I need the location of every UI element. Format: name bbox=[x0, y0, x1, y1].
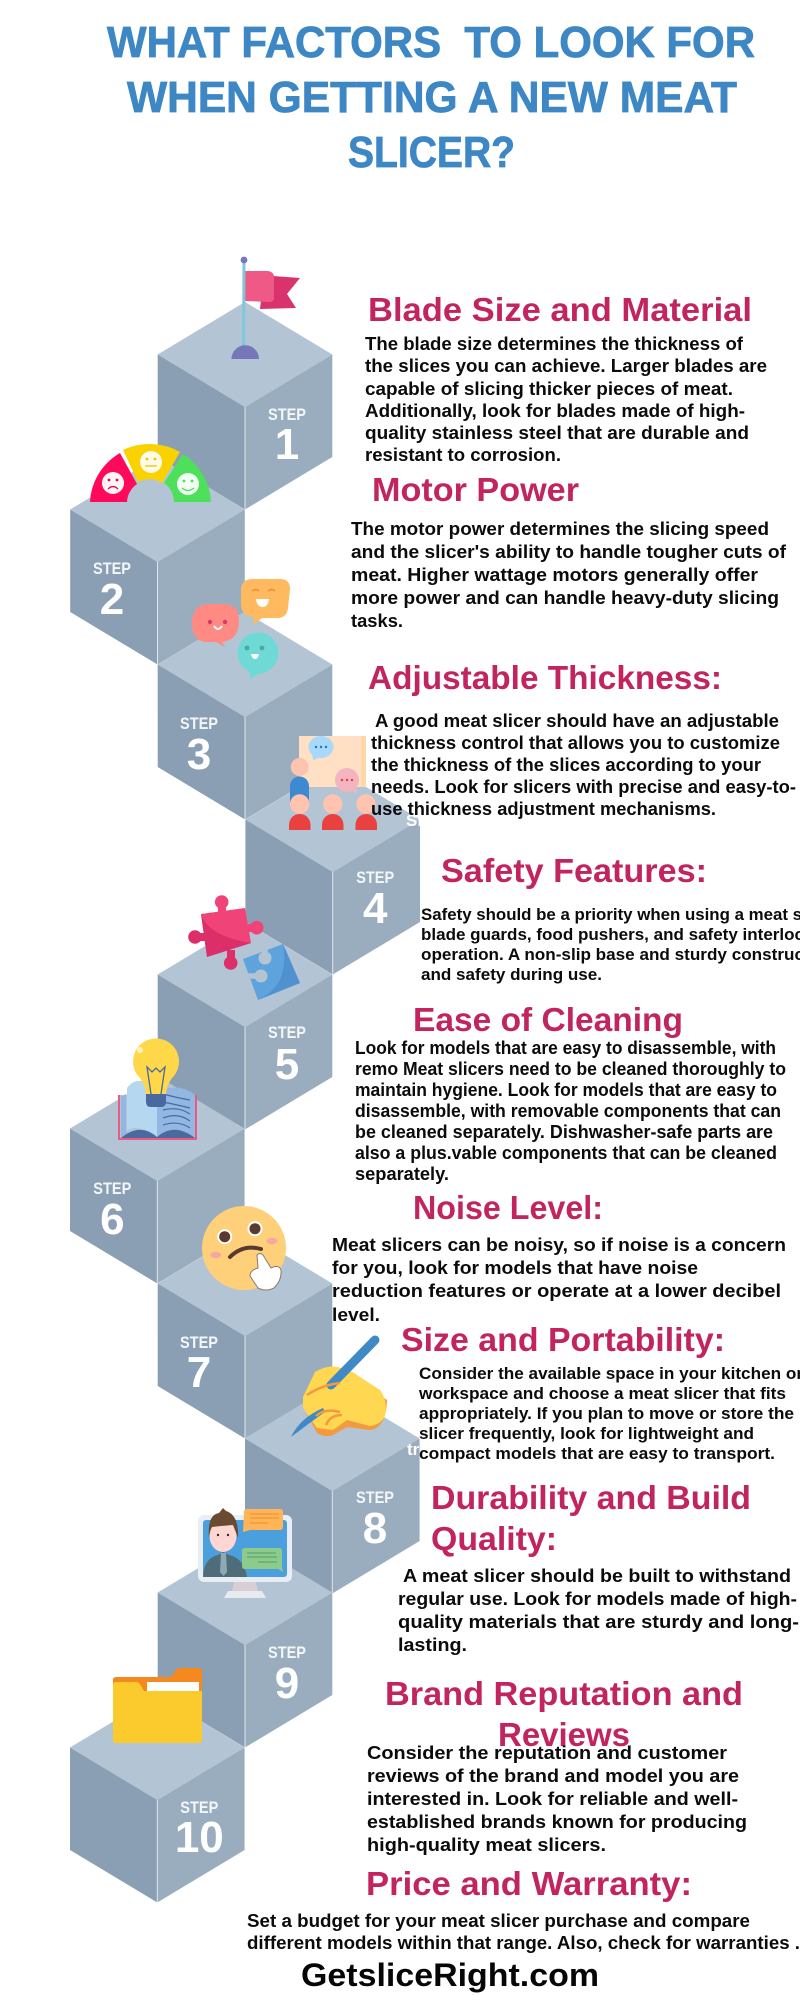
body text: thickness: needs. Look for slicers with precise and easy-to- bbox=[371, 776, 796, 797]
section: Motor Power bbox=[351, 471, 787, 631]
step 7 block: STEP bbox=[180, 1333, 218, 1352]
body text: cleaning: maintain hygiene. Look for models that are easy to bbox=[355, 1079, 777, 1100]
step 9 block: 9 bbox=[275, 1659, 299, 1708]
body text: thickness: A good meat slicer should have an adjustable bbox=[375, 710, 779, 731]
step 8 block: STEP bbox=[356, 1488, 394, 1507]
body text: blade: Additionally, look for blades made of high- bbox=[365, 400, 745, 421]
body text: cleaning: be cleaned separately. Dishwasher-safe parts are bbox=[355, 1121, 773, 1142]
icon: mood gauge bbox=[90, 444, 211, 502]
section: Durability and Build Quality: Durability and Build bbox=[431, 1479, 751, 1516]
icon: book and light bulb bbox=[118, 1038, 197, 1140]
step 1 block: STEP bbox=[268, 405, 306, 424]
step 6 block: 6 bbox=[100, 1195, 125, 1244]
footer: website: GetsliceRight.com bbox=[301, 1957, 599, 1993]
body text: size: workspace and choose a meat slicer that fits bbox=[418, 1385, 786, 1403]
body text: size bbox=[418, 1365, 800, 1463]
step 4 block: STEP bbox=[356, 868, 394, 887]
step 1 block: 1 bbox=[275, 420, 299, 469]
body text: noise: level. bbox=[332, 1304, 380, 1325]
stray clipped label on step 4: Sl bbox=[406, 811, 422, 830]
body text: size: appropriately. If you plan to move or store the bbox=[419, 1405, 794, 1423]
section: Blade Size and Material bbox=[365, 291, 767, 465]
step 6 block: STEP bbox=[93, 1179, 131, 1198]
section: Brand Reputation and Reviews bbox=[367, 1675, 747, 1855]
section: Durability and Build Quality: Quality: bbox=[431, 1520, 557, 1557]
body text: blade: The blade size determines the thickness of bbox=[365, 333, 744, 354]
title: WHAT FACTORS TO LOOK FOR bbox=[107, 18, 755, 67]
body text: brand: established brands known for producing bbox=[367, 1811, 747, 1832]
body text: durability: regular use. Look for models made of high- bbox=[398, 1588, 797, 1609]
body text: noise: Meat slicers can be noisy, so if noise is a concern bbox=[332, 1234, 786, 1255]
icon: puzzle pieces bbox=[188, 895, 300, 1000]
step 9 block: STEP bbox=[268, 1643, 306, 1662]
section: Ease of Cleaning: Ease of Cleaning bbox=[413, 1001, 683, 1038]
section: Brand Reputation and Reviews: Brand Reputation and bbox=[385, 1675, 743, 1712]
body text: blade: resistant to corrosion. bbox=[365, 444, 561, 465]
body text: noise: for you, look for models that have noise bbox=[332, 1257, 698, 1278]
body text: brand: Consider the reputation and customer bbox=[367, 1742, 727, 1763]
body text: size: Consider the available space in your kitchen or bbox=[419, 1365, 800, 1383]
section: Durability and Build Quality bbox=[398, 1479, 799, 1655]
body text: cleaning: disassemble, with removable components that can bbox=[355, 1100, 781, 1121]
body text: motor: tasks. bbox=[351, 610, 403, 631]
body text: motor bbox=[351, 518, 787, 631]
icon: meeting bbox=[289, 736, 377, 830]
section: Size and Portability bbox=[401, 1321, 800, 1463]
body text: safety: blade guards, food pushers, and safety interloc bbox=[421, 926, 800, 944]
section: Motor Power: Motor Power bbox=[372, 471, 579, 508]
step 5 block: 5 bbox=[275, 1040, 299, 1089]
section: Size and Portability: Size and Portability: bbox=[401, 1321, 725, 1358]
body text: cleaning bbox=[355, 1037, 786, 1184]
step 9 block bbox=[158, 1540, 332, 1748]
icon: folder bbox=[113, 1668, 202, 1743]
body text: brand: interested in. Look for reliable and well- bbox=[367, 1788, 738, 1809]
body text: motor: meat. Higher wattage motors generally offer bbox=[351, 564, 758, 585]
section: Price and Warranty: Price and Warranty: bbox=[366, 1865, 692, 1902]
body text: noise bbox=[332, 1234, 786, 1325]
step 6 block bbox=[70, 1076, 245, 1284]
body text: brand bbox=[367, 1742, 747, 1855]
section: Blade Size and Material: Blade Size and Material bbox=[368, 291, 752, 328]
body text: brand: reviews of the brand and model you are bbox=[367, 1765, 739, 1786]
step 8 block bbox=[245, 1386, 420, 1594]
body text: size: compact models that are easy to transport. bbox=[419, 1445, 775, 1463]
section: Safety Features: Safety Features: bbox=[441, 852, 707, 889]
section: Noise Level: Noise Level: bbox=[413, 1189, 603, 1226]
icon: thinking face bbox=[202, 1206, 286, 1290]
step 7 block bbox=[158, 1231, 332, 1438]
step 2 block: 2 bbox=[100, 575, 124, 624]
body text: cleaning: also a plus.vable components that can be cleaned bbox=[355, 1142, 777, 1163]
body text: blade bbox=[365, 333, 767, 465]
body text: price bbox=[247, 1910, 800, 1953]
step 2 block bbox=[70, 457, 245, 664]
step 1 block bbox=[158, 302, 332, 510]
body text: safety: operation. A non-slip base and sturdy construc bbox=[421, 946, 800, 964]
icon: monitor with presenter bbox=[198, 1508, 292, 1598]
body text: thickness bbox=[371, 710, 796, 819]
body text: durability: lasting. bbox=[398, 1634, 467, 1655]
step 5 block bbox=[158, 922, 332, 1130]
section: Adjustable Thickness bbox=[368, 659, 796, 819]
title bbox=[107, 18, 755, 177]
section: Noise Level bbox=[332, 1189, 786, 1325]
body text: blade: the slices you can achieve. Larger blades are bbox=[365, 355, 767, 376]
step 8 block: 8 bbox=[363, 1504, 387, 1553]
body text: cleaning: separately. bbox=[355, 1163, 449, 1184]
step 5 block: STEP bbox=[268, 1023, 306, 1042]
body text: motor: more power and can handle heavy-duty slicing bbox=[351, 587, 779, 608]
step 3 block: STEP bbox=[180, 714, 218, 733]
section: Ease of Cleaning bbox=[355, 1001, 786, 1184]
body text: blade: capable of slicing thicker pieces of meat. bbox=[365, 378, 733, 399]
body text: price: Set a budget for your meat slicer purchase and compare bbox=[247, 1910, 750, 1931]
body text: thickness: the thickness of the slices according to your bbox=[371, 754, 761, 775]
icon: flag bbox=[232, 257, 300, 359]
body text: thickness: thickness control that allows you to customize bbox=[371, 732, 780, 753]
step 2 block: STEP bbox=[93, 559, 131, 578]
step 10 block bbox=[70, 1695, 245, 1902]
body text: durability: quality materials that are sturdy and long- bbox=[398, 1611, 799, 1632]
body text: motor: The motor power determines the slicing speed bbox=[351, 518, 769, 539]
step 4 block: 4 bbox=[363, 884, 388, 933]
body text: cleaning: remo Meat slicers need to be cleaned thoroughly to bbox=[355, 1058, 786, 1079]
body text: thickness: use thickness adjustment mechanisms. bbox=[371, 798, 716, 819]
section: Brand Reputation and Reviews: Reviews bbox=[498, 1716, 630, 1753]
icon: hand with pen bbox=[291, 1340, 387, 1437]
icon: chat bubbles bbox=[192, 579, 290, 679]
section: Price and Warranty bbox=[247, 1865, 800, 1953]
title: WHEN GETTING A NEW MEAT bbox=[127, 73, 737, 122]
body text: motor: and the slicer's ability to handle tougher cuts of bbox=[351, 541, 787, 562]
step 10 block: 10 bbox=[175, 1813, 224, 1862]
step 3 block: 3 bbox=[187, 730, 211, 779]
body text: durability: A meat slicer should be built to withstand bbox=[403, 1565, 791, 1586]
body text: price: different models within that range. Also, check for warranties . bbox=[247, 1932, 800, 1953]
title: SLICER? bbox=[348, 128, 515, 177]
step 4 block bbox=[245, 767, 420, 974]
step 7 block: 7 bbox=[187, 1348, 211, 1397]
section: Adjustable Thickness: Adjustable Thickness: bbox=[368, 659, 722, 696]
body text: safety: Safety should be a priority when using a meat s bbox=[421, 906, 800, 924]
body text: cleaning: Look for models that are easy to disassemble, with bbox=[355, 1037, 776, 1058]
body text: durability bbox=[398, 1565, 799, 1655]
body text: size: slicer frequently, look for lightweight and bbox=[419, 1425, 754, 1443]
body text: blade: quality stainless steel that are durable and bbox=[365, 422, 749, 443]
step 10 block: STEP bbox=[180, 1798, 218, 1817]
body text: safety bbox=[421, 906, 800, 984]
stray clipped label on step 8: tr bbox=[407, 1440, 420, 1459]
body text: noise: reduction features or operate at a lower decibel bbox=[332, 1280, 781, 1301]
section: Safety Features bbox=[421, 852, 800, 984]
body text: safety: and safety during use. bbox=[421, 966, 602, 984]
step 3 block bbox=[158, 612, 332, 820]
body text: brand: high-quality meat slicers. bbox=[367, 1834, 606, 1855]
